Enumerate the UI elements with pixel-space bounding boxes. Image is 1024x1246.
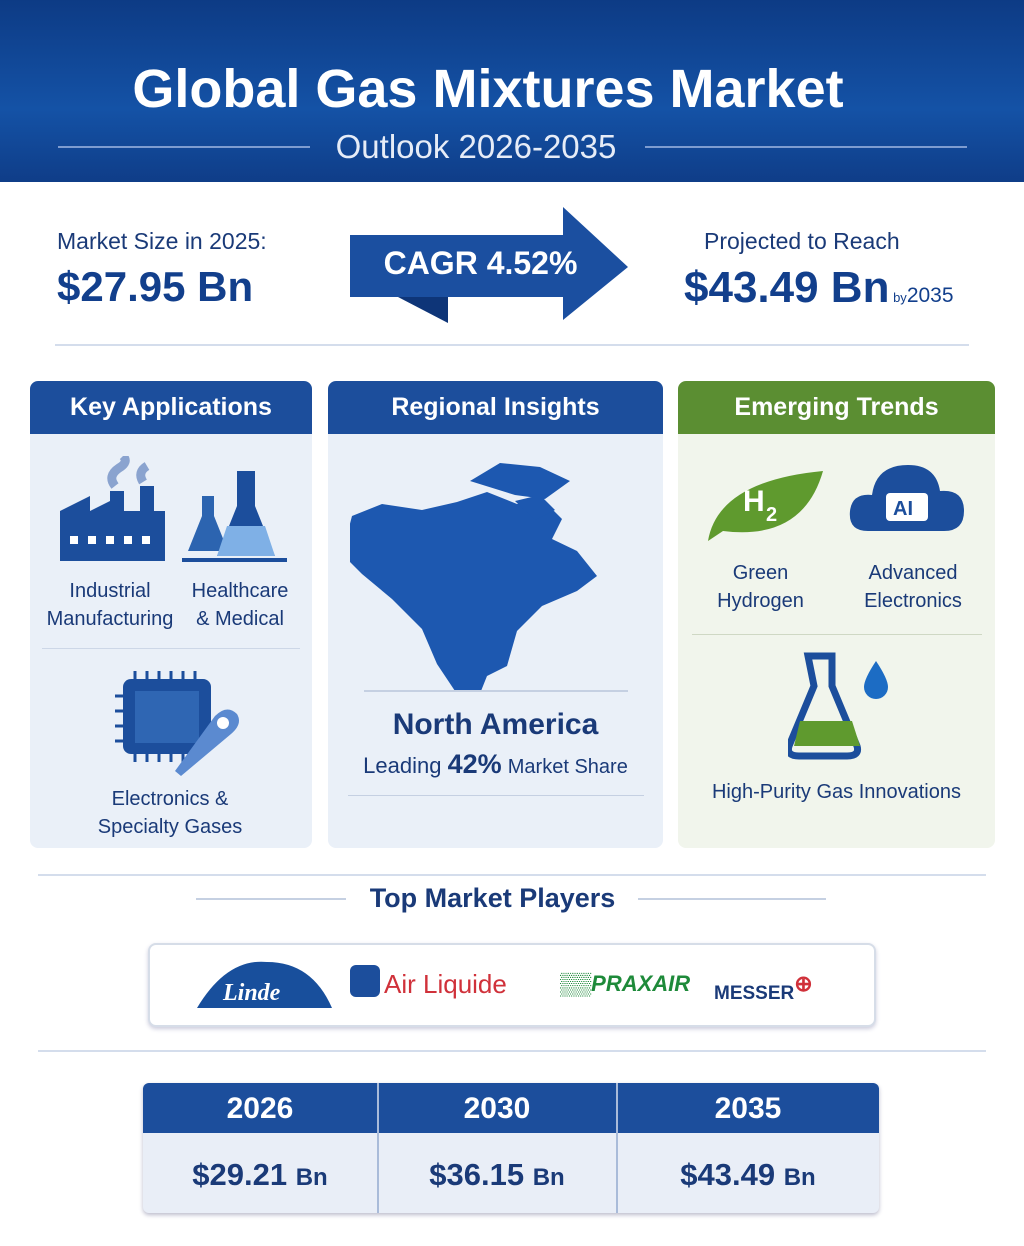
logo: praxair: ▒▒PRAXAIR: [560, 971, 690, 996]
icon: factory: [60, 456, 165, 561]
logo: messer: MESSER⊕: [714, 971, 813, 1004]
panel: key applications: Healthcare: [192, 580, 288, 602]
panel: key applications: Specialty Gases: [98, 816, 242, 838]
table: yearly forecast: $36.15 Bn: [429, 1157, 565, 1192]
arrow: CAGR: [350, 207, 628, 323]
panel: regional insights: Leading 42% Market Share: [363, 749, 628, 779]
panel: emerging trends: [678, 381, 995, 848]
panel: key applications: & Medical: [196, 608, 284, 630]
logo: air liquide: [350, 965, 507, 999]
icon: AI cloud: [850, 465, 964, 531]
table: yearly forecast: $43.49 Bn: [680, 1157, 816, 1192]
icon: chip: [115, 671, 239, 776]
logos box: [148, 943, 876, 1027]
panel: emerging trends: Electronics: [864, 590, 962, 612]
panel: key applications: Manufacturing: [47, 608, 173, 630]
panel: emerging trends: Green: [733, 562, 788, 584]
market size 2025: Market Size in 2025:: [57, 228, 267, 254]
icon: flasks: [182, 471, 287, 562]
table: yearly forecast: $29.21 Bn: [192, 1157, 328, 1192]
panel: emerging trends: Hydrogen: [717, 590, 804, 612]
arrow: CAGR: CAGR 4.52%: [384, 245, 577, 281]
panel: key applications: Electronics &: [112, 788, 228, 810]
icon: green hydrogen leaf: [708, 471, 823, 541]
panel: key applications: Key Applications: [70, 393, 272, 421]
header banner: [0, 0, 1024, 182]
text: north america share: North America: [393, 708, 598, 741]
projected 2035: Projected to Reach: [704, 228, 900, 254]
panel: key applications: [30, 381, 312, 848]
panel: emerging trends: High-Purity Gas Innovations: [712, 781, 961, 803]
logo: linde: Linde: [222, 980, 281, 1006]
logo: air liquide: Air Liquide: [384, 969, 507, 999]
logo: linde: [197, 962, 332, 1008]
icon: green hydrogen leaf: H: [743, 485, 765, 518]
icon: flask with drop: [788, 652, 888, 760]
table: yearly forecast: 2035: [715, 1092, 781, 1125]
market size 2025: [57, 228, 267, 310]
subtitle: Outlook 2026-2035: [336, 128, 616, 165]
icon: AI cloud: AI: [893, 498, 913, 520]
projected 2035: $43.49 Bn by2035: [684, 263, 954, 312]
projected 2035: [684, 228, 954, 312]
panel: emerging trends: Advanced: [869, 562, 957, 584]
map: north america: [350, 463, 597, 690]
table: yearly forecast: [143, 1083, 879, 1213]
table: yearly forecast: 2030: [464, 1092, 530, 1125]
panel: regional insights: Regional Insights: [391, 393, 600, 421]
table: yearly forecast: 2026: [227, 1092, 293, 1125]
panel: regional insights: [328, 381, 663, 848]
panel: key applications: Industrial: [69, 580, 151, 602]
heading: top market players: Top Market Players: [370, 883, 615, 913]
title: Global Gas Mixtures Market: [132, 59, 844, 119]
panel: emerging trends: Emerging Trends: [734, 393, 939, 421]
market size 2025: $27.95 Bn: [57, 263, 253, 310]
icon: green hydrogen leaf: 2: [766, 504, 777, 526]
